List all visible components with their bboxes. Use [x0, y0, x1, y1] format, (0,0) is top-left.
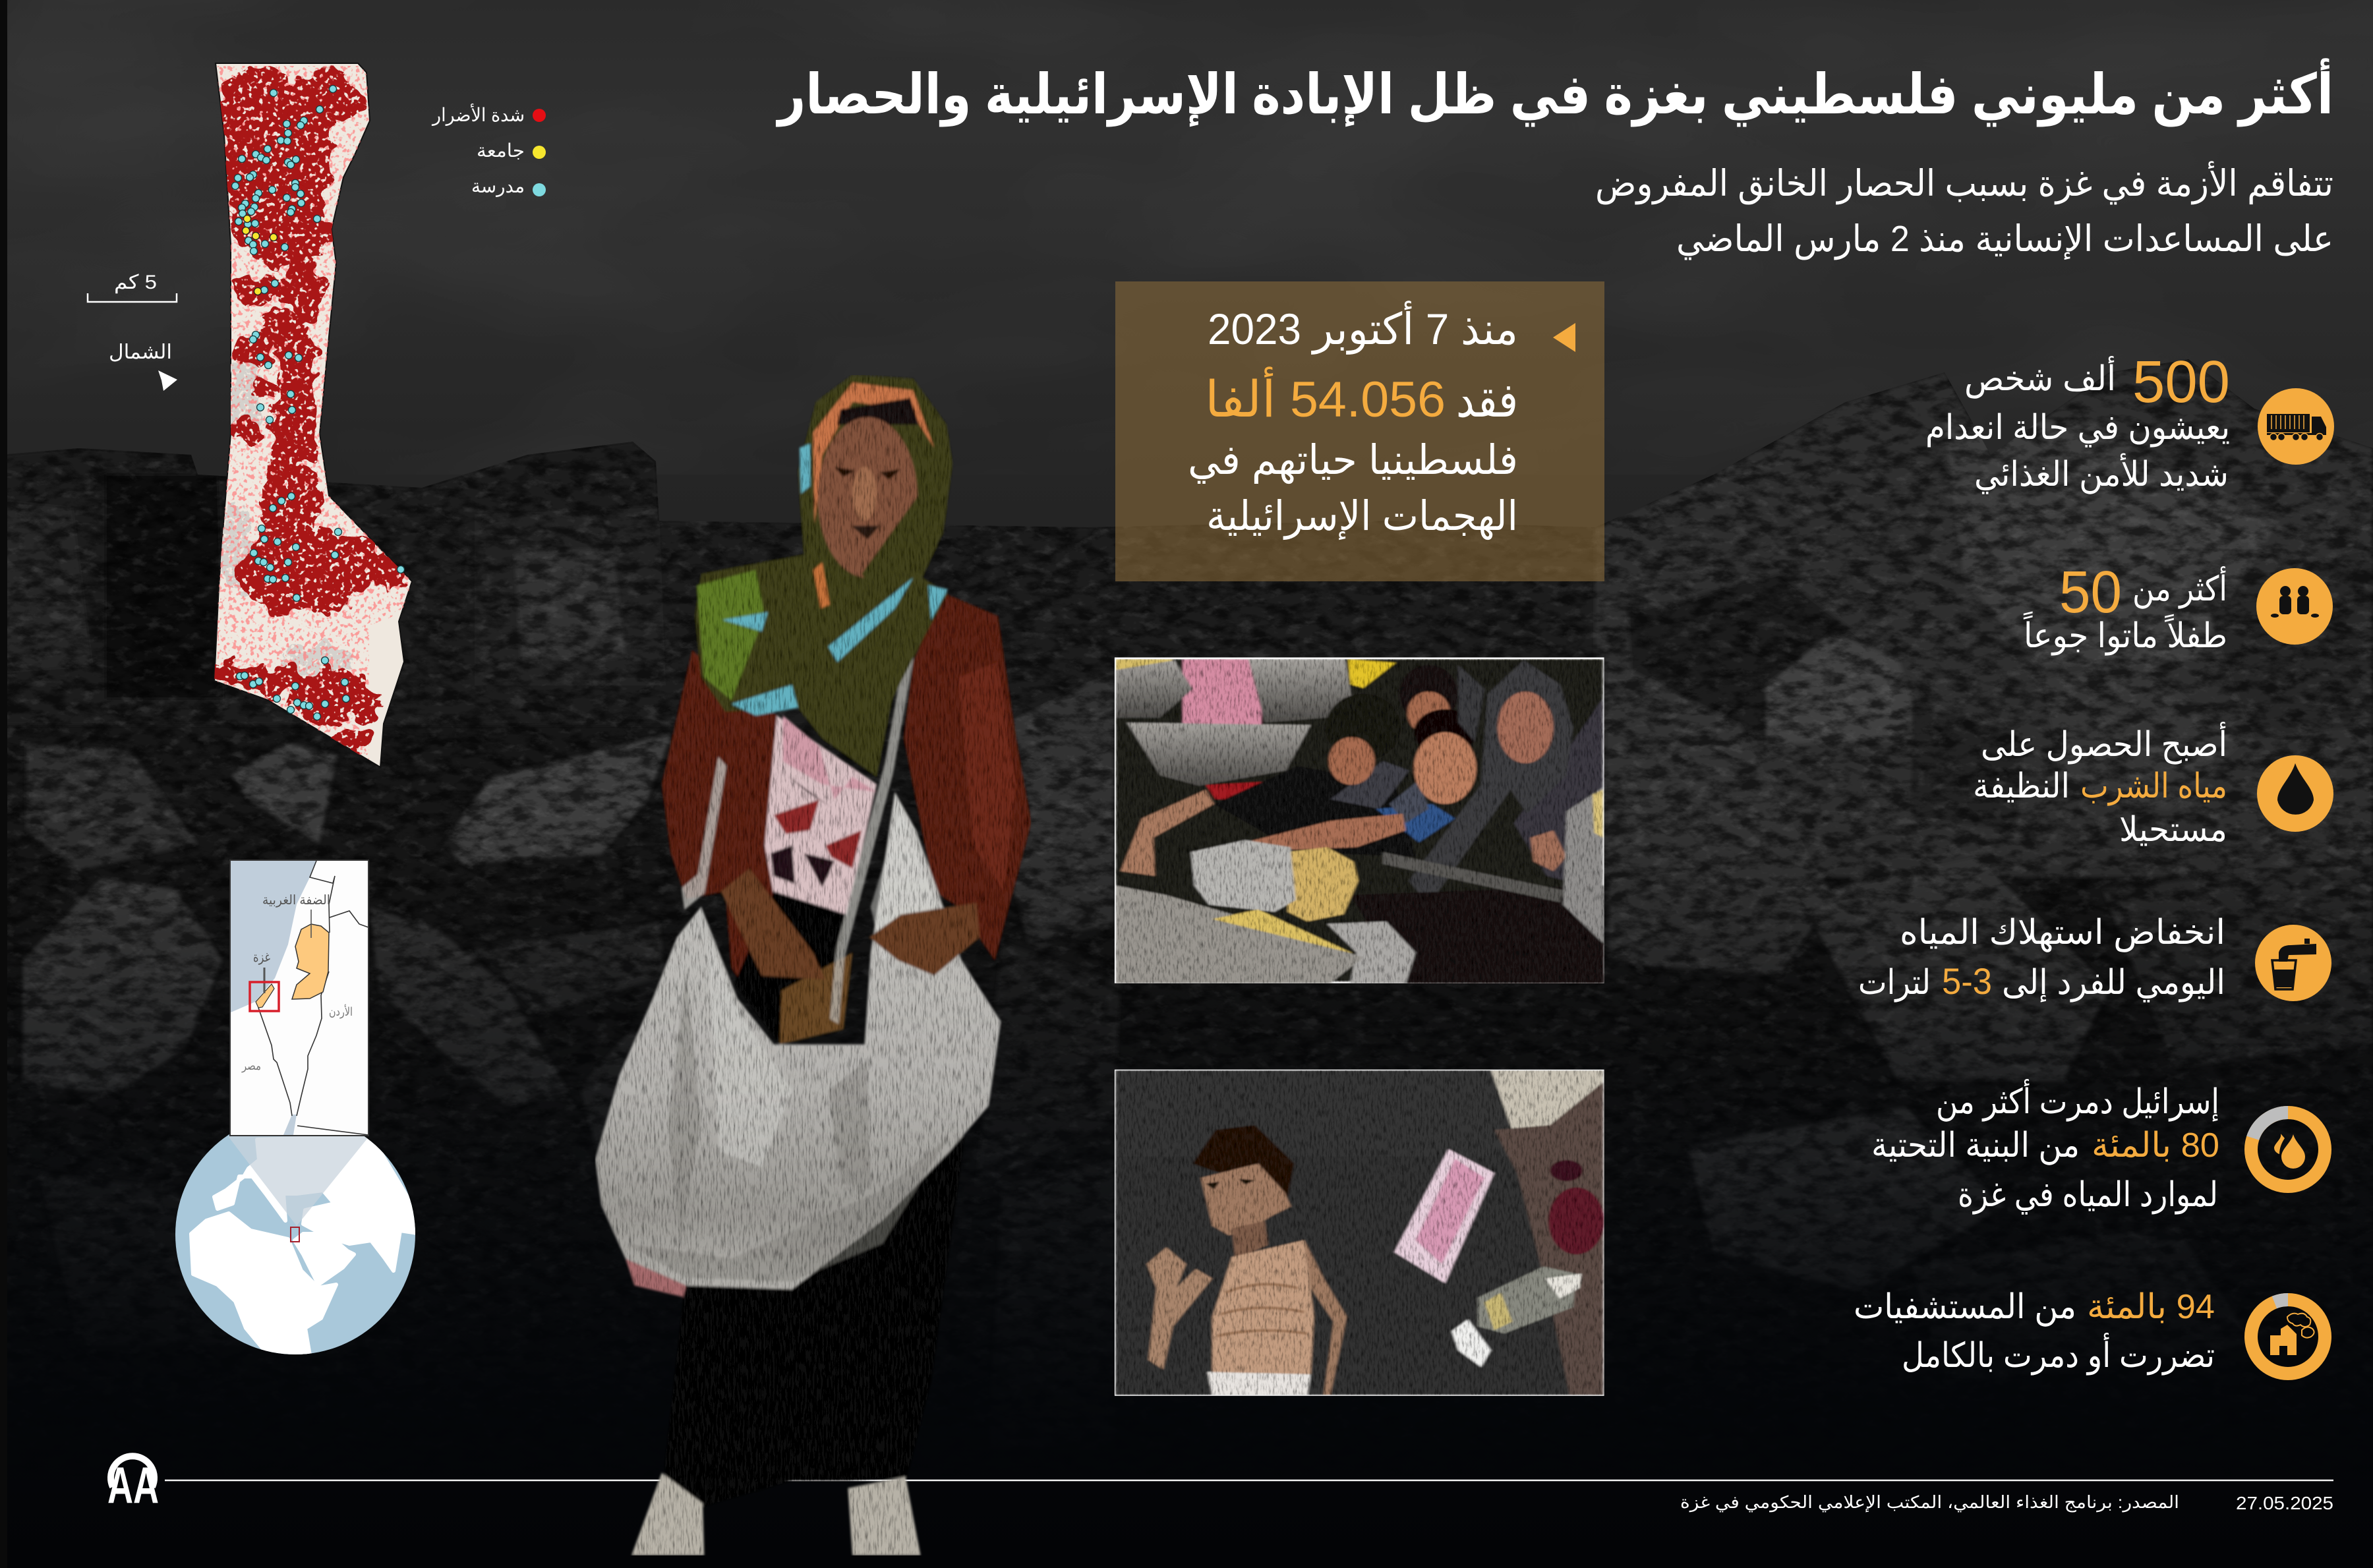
subtitle: [1595, 161, 2333, 260]
callout text: الهجمات الإسرائيلية: [1206, 494, 1518, 540]
callout figure: 54.056 ألفا: [1205, 366, 1446, 428]
West Bank: [292, 924, 329, 999]
callout figure: فقد: [1456, 374, 1518, 427]
photo: crowd at food distribution: [1115, 657, 1604, 983]
callout text: فلسطينيا حياتهم في: [1188, 438, 1518, 484]
stat: children starved: 50: [2059, 560, 2122, 625]
scarf: [695, 375, 952, 776]
map legend: [431, 103, 546, 197]
stat: drinking water: مستحيلا: [2119, 811, 2227, 849]
stat: food insecurity: 500: [2132, 349, 2230, 415]
face: [817, 417, 918, 578]
map: Gaza damage: [214, 63, 415, 767]
map scale bar: 5 كم: [114, 272, 157, 294]
icon: callout triangle: [1553, 323, 1575, 352]
stat: water infrastructure: 80 بالمئة: [2092, 1126, 2219, 1165]
icon: tap and glass: [2255, 925, 2331, 1001]
photo: malnourished child: [1115, 1070, 1604, 1396]
stat: drinking water: [1973, 722, 2333, 849]
stat: water infrastructure: لموارد المياه في غزة: [1958, 1176, 2218, 1215]
donut chart: 94 percent: [2251, 1300, 2325, 1374]
Anadolu Agency logo: [107, 1456, 159, 1514]
cardigan: [662, 593, 1031, 1029]
stat: food insecurity: [1925, 349, 2334, 494]
university markers: [243, 215, 277, 295]
icon: water drop: [2257, 755, 2333, 832]
map legend: جامعة: [477, 140, 525, 161]
callout figure: [1205, 366, 1518, 428]
stat: daily water: 5-3: [1942, 960, 1992, 1002]
stat: drinking water: مياه الشرب: [2080, 767, 2227, 806]
stat: water infrastructure: إسرائيل دمرت أكثر من: [1936, 1079, 2219, 1122]
stat: hospitals: 94 بالمئة: [2087, 1288, 2215, 1326]
stat: food insecurity: يعيشون في حالة انعدام: [1925, 409, 2230, 448]
locator map: غزة: [253, 950, 270, 965]
photo: woman with sack: [595, 375, 1031, 1555]
Anadolu Agency logo: AA: [107, 1456, 159, 1514]
stat: children starved: [2023, 560, 2333, 656]
callout text: [1188, 438, 1518, 540]
donut chart: 80 percent: [2251, 1113, 2325, 1186]
stat: water infrastructure: من البنية التحتية: [1871, 1126, 2080, 1165]
stat: drinking water: النظيفة: [1973, 767, 2070, 805]
skirt: [665, 1121, 964, 1507]
stat: children starved: أكثر من: [2132, 566, 2227, 609]
shoes: [631, 1473, 921, 1555]
icon: truck: [2258, 388, 2334, 465]
map legend: مدرسة: [471, 176, 525, 197]
map legend: شدة الأضرار: [431, 103, 525, 126]
stat: daily water: اليومي للفرد إلى: [2002, 964, 2225, 1002]
callout date: منذ 7 أكتوبر 2023: [1208, 301, 1518, 355]
school markers: [232, 86, 405, 720]
stat: daily water: لترات: [1858, 964, 1931, 1002]
locator map: الأردن: [329, 1004, 353, 1018]
stat: children starved: طفلاً ماتوا جوعاً: [2023, 612, 2227, 656]
subtitle: تتفاقم الأزمة في غزة بسبب الحصار الخانق المفروض: [1595, 161, 2333, 205]
shirt: [765, 716, 877, 918]
panel: death toll callout: [1115, 281, 1604, 581]
stat: hospitals: [1854, 1288, 2325, 1376]
hands: [721, 869, 980, 979]
stat: daily water: انخفاض استهلاك المياه: [1900, 914, 2225, 952]
stat: food insecurity: ألف شخص: [1964, 356, 2116, 399]
locator map: الضفة الغربية: [262, 893, 330, 908]
subtitle: على المساعدات الإنسانية منذ 2 مارس الماضي: [1676, 218, 2333, 260]
sack: [595, 792, 1001, 1289]
stat: hospitals: تضررت أو دمرت بالكامل: [1902, 1333, 2215, 1376]
icon: children: [2256, 568, 2333, 645]
north arrow: [109, 341, 177, 391]
stat: daily water: [1858, 914, 2331, 1002]
locator globe: [175, 1134, 415, 1354]
stat: food insecurity: شديد للأمن الغذائي: [1974, 453, 2229, 494]
north arrow: الشمال: [109, 341, 172, 363]
source: المصدر: برنامج الغذاء العالمي، المكتب الإعلامي الحكومي في غزة: [1680, 1492, 2179, 1513]
footer rule: [165, 1480, 2333, 1481]
stat: hospitals: من المستشفيات: [1854, 1288, 2076, 1327]
Gaza: [256, 984, 274, 1008]
stat: water infrastructure: [1871, 1079, 2325, 1215]
locator map: مصر: [241, 1059, 261, 1073]
date: 27.05.2025: [2236, 1493, 2333, 1513]
dark opening and brown object: [734, 891, 846, 1045]
map scale bar: [88, 272, 177, 302]
locator map: [230, 860, 368, 1136]
stat: drinking water: أصبح الحصول على: [1981, 722, 2227, 765]
